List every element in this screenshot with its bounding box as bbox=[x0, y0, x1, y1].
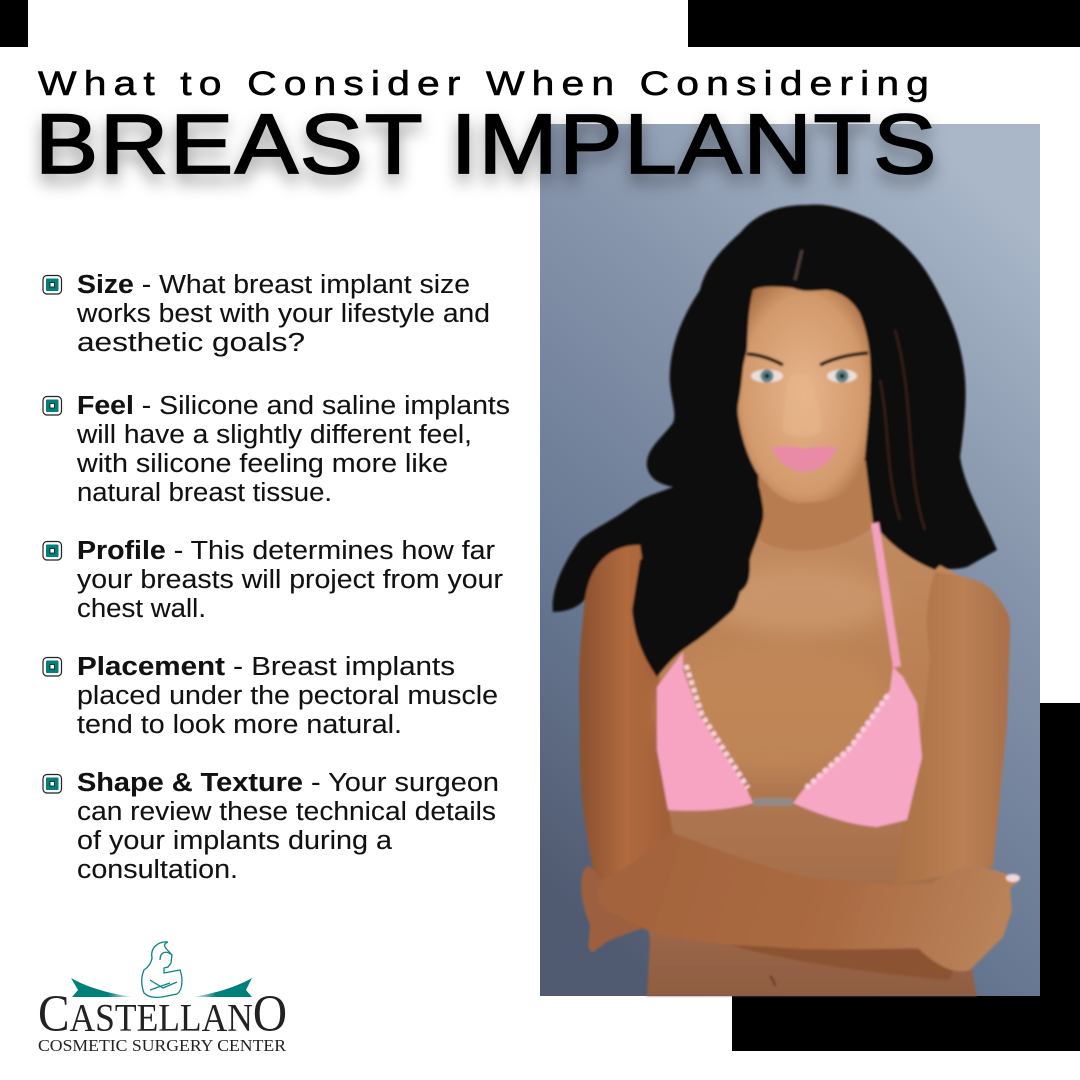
halter strap bbox=[875, 523, 897, 667]
pink top right cup bbox=[793, 667, 922, 827]
bullet: shape and texture: can review these technical details bbox=[77, 798, 496, 826]
logo swoosh right bbox=[192, 978, 252, 997]
nail bbox=[1006, 874, 1020, 882]
black frame block: bottom right bbox=[732, 703, 1080, 1051]
torso and chest bbox=[600, 473, 1000, 996]
black corner block: top left bbox=[0, 0, 28, 47]
upper forearm and hand bbox=[597, 833, 1020, 971]
bullet: placement: tend to look more natural. bbox=[77, 711, 402, 739]
lace trim bbox=[686, 665, 888, 788]
bullet: profile bbox=[43, 537, 504, 623]
bullet: size: works best with your lifestyle and bbox=[76, 300, 490, 328]
left upper arm bbox=[579, 545, 673, 883]
bullet: feel: will have a slightly different feel, bbox=[76, 421, 472, 449]
black corner block: top right bbox=[688, 0, 1080, 47]
bullet: placement: Placement - Breast implants bbox=[77, 653, 455, 681]
bullet: placement: placed under the pectoral muscle bbox=[77, 682, 498, 710]
hair front lock left bbox=[632, 290, 763, 677]
bullet: placement bbox=[43, 653, 498, 739]
title bbox=[35, 65, 938, 191]
photo panel: smiling woman with dark hair bbox=[540, 124, 1040, 996]
bullet: shape and texture: Shape & Texture - Your surgeon bbox=[77, 769, 499, 797]
center chest highlights bbox=[655, 645, 895, 775]
neck bbox=[758, 460, 877, 551]
bullet: size bbox=[43, 271, 490, 357]
bullet: feel: Feel - Silicone and saline implants bbox=[77, 392, 510, 420]
logo tagline: COSMETIC SURGERY CENTER bbox=[38, 1036, 286, 1055]
logo swoosh left bbox=[71, 978, 133, 997]
chest highlight bbox=[710, 565, 890, 635]
bullet: feel: with silicone feeling more like bbox=[76, 450, 448, 478]
title line two with shadow: BREAST IMPLANTS bbox=[35, 97, 938, 191]
logo icon: figure outline bbox=[142, 942, 182, 997]
navel bbox=[770, 976, 775, 986]
hair back bbox=[553, 205, 997, 612]
brows bbox=[747, 353, 868, 365]
face bbox=[737, 287, 871, 503]
photo backdrop bbox=[540, 124, 1040, 996]
bullet: size: aesthetic goals? bbox=[77, 329, 305, 357]
logo: Castellano Cosmetic Surgery Center bbox=[38, 942, 287, 1055]
woman figure bbox=[553, 205, 1020, 996]
hidden left hand bbox=[581, 866, 645, 952]
pink top left cup bbox=[657, 652, 753, 811]
bullet list bbox=[43, 271, 510, 884]
right upper arm bbox=[893, 572, 1010, 885]
bullet: profile: Profile - This determines how far bbox=[77, 537, 496, 565]
bullet: profile: your breasts will project from your bbox=[77, 566, 504, 594]
bullet: feel bbox=[43, 392, 510, 507]
title line one: What to Consider When Considering bbox=[38, 65, 936, 103]
hair front lock right bbox=[827, 240, 965, 570]
eyes bbox=[751, 370, 857, 382]
bullet: shape and texture: of your implants during a bbox=[77, 827, 393, 855]
bullet: shape and texture bbox=[43, 769, 499, 884]
bullet: profile: chest wall. bbox=[77, 595, 206, 623]
left strap peek bbox=[710, 540, 730, 574]
centre clasp bbox=[753, 798, 793, 806]
bullet: size: Size - What breast implant size bbox=[77, 271, 470, 299]
lips bbox=[771, 446, 838, 472]
logo wordmark: CASTELLANO bbox=[38, 986, 287, 1042]
hair highlights bbox=[795, 250, 925, 530]
bullet: feel: natural breast tissue. bbox=[77, 479, 332, 507]
bullet: shape and texture: consultation. bbox=[77, 856, 238, 884]
nose bbox=[783, 375, 821, 436]
lower forearm bbox=[730, 945, 960, 980]
